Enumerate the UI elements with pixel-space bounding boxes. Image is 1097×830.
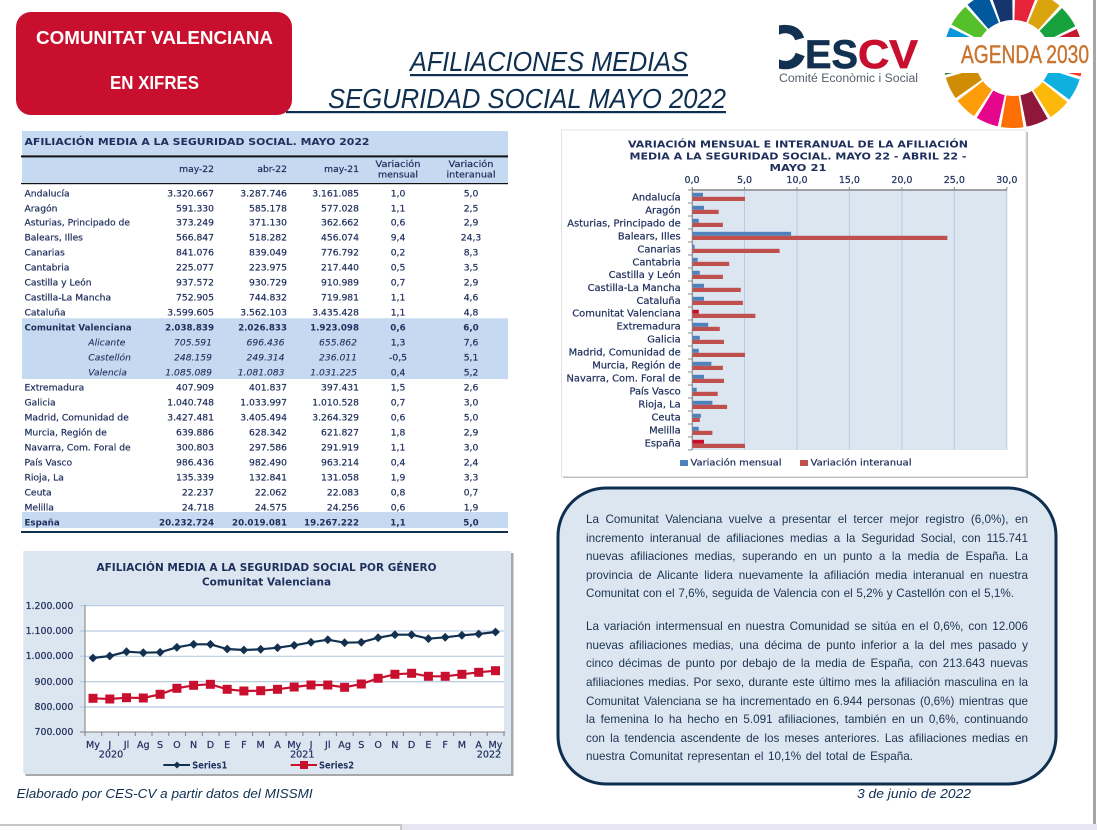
table rows: 937.572 [176,277,214,288]
table rows: 24.575 [255,502,287,513]
table rows: 22.062 [255,487,287,498]
table rows: 7,6 [464,337,478,348]
table rows: 371.130 [249,217,287,228]
table rows: 3.562.103 [240,307,287,318]
bar chart top axis labels: 0,0 [684,175,700,186]
x axis labels: D [408,740,415,751]
table rows: 2,9 [464,217,478,228]
table rows: 24.256 [327,502,359,513]
table rows: 135.339 [176,472,214,483]
table rows: Cantabria [24,262,69,273]
table rows: 0,6 [391,217,405,228]
panel: commentary box background [558,488,1056,784]
table rows: 19.267.222 [304,518,359,528]
bars: annual variation [692,197,947,448]
bars: monthly variation [692,193,791,444]
y axis labels: 800.000 [35,702,73,713]
table rows: 776.792 [321,247,359,258]
table rows: 910.989 [321,277,359,288]
bar chart top axis labels: 15,0 [839,175,860,186]
table rows: 5,0 [464,412,478,423]
table rows: 5,0 [463,518,479,528]
table rows: 0,6 [391,412,405,423]
table rows: 752.905 [176,292,214,303]
x axis labels: D [207,740,214,751]
table rows: País Vasco [24,457,73,468]
table rows: 585.178 [249,203,287,214]
highlighted band Comunitat Valenciana [22,318,508,379]
x axis labels: My [489,740,503,751]
bar chart category labels: Balears, Illes [618,232,681,242]
x axis labels: 2021 [290,750,315,760]
table rows: 696.436 [246,337,285,348]
bar chart top axis labels [684,175,1017,186]
bar chart top axis labels: 20,0 [891,175,912,186]
table rows: Andalucía [24,188,70,199]
table rows: Navarra, Com. Foral de [24,442,131,453]
text: Comunitat Valenciana se ha incrementado en 6.944 personas (0,6%) mientras que [586,695,1028,708]
bar chart top axis labels: 5,0 [737,175,752,186]
table rows: 3,3 [464,472,478,483]
table rows: 1,8 [391,427,405,438]
table rows: 217.440 [321,262,359,273]
table rows: 0,5 [391,262,405,273]
table column headers: abr-22 [257,164,287,175]
bar chart title: VARIACIÓN MENSUAL E INTERANUAL DE LA AFILIACIÓN [628,138,968,150]
x axis labels [86,740,503,760]
x axis labels: O [173,740,181,751]
badge: Comunitat Valenciana en xifres [16,12,292,115]
table rows: 131.058 [321,472,359,483]
table rows: 1.081.083 [238,367,285,378]
text: nuestra Comunitat representan el 10,1% del total de España. [586,750,913,763]
table rows: 1,1 [391,203,405,214]
table rows: 3.264.329 [312,412,359,423]
table rows: 0,7 [464,487,478,498]
x axis labels: My [287,740,301,751]
x axis labels: S [157,740,163,751]
line chart legend: Series2 [319,760,354,772]
x axis labels: Jl [123,740,129,751]
table rows: 24.718 [182,502,214,513]
bar chart category labels: Comunitat Valenciana [572,308,681,320]
text block: commentary [586,513,1028,763]
table rows: 20.019.081 [232,518,287,528]
bar chart category labels [567,192,681,450]
table rows: 1.010.528 [312,397,359,408]
table rows: 2,9 [464,427,478,438]
y axis labels: 1.000.000 [26,651,73,662]
table rows: 401.837 [249,382,287,393]
table rows: 132.841 [249,472,287,483]
table rows: 577.028 [321,203,359,214]
logo: Agenda 2030 wheel [937,0,1092,134]
line series 2 [93,671,496,699]
text: nuevas afiliaciones medias, una décima de punto inferior a la del mes pasado y [586,639,1028,652]
table column headers: may-21 [324,164,359,175]
panel: table of average affiliation [21,131,508,533]
table rows: 9,4 [391,232,405,243]
table rows: Castilla y León [24,277,92,288]
bar chart category labels: Cataluña [637,296,681,307]
panel: line chart by gender [23,551,514,776]
table rows: Cataluña [24,307,66,318]
table rows: 22.237 [182,487,214,498]
bar chart title: MEDIA A LA SEGURIDAD SOCIAL. MAYO 22 - ABRIL 22 - [630,152,966,162]
table rows: Castellón [88,352,131,363]
date: 3 de junio de 2022 [857,786,972,801]
text: afiliaciones medias. Por sexo, durante este último mes la afiliación masculina en la [586,676,1028,689]
table rows: 591.330 [176,203,214,214]
y axis labels [26,601,73,738]
table rows: 236.011 [319,352,357,363]
table rows: 1,5 [391,382,405,393]
x axis labels: S [358,740,364,751]
x axis labels: My [86,740,100,751]
table rows: 407.909 [176,382,214,393]
bar chart category labels: Andalucía [632,192,681,204]
table rows: 20.232.724 [159,518,214,528]
x axis labels: N [190,740,197,751]
table rows: 841.076 [176,247,214,258]
table rows: 3.320.667 [167,188,214,199]
bar chart category labels: País Vasco [629,386,681,398]
x axis labels: 2020 [99,750,123,760]
source note: Elaborado por CES-CV a partir datos del MISSMI [17,786,313,801]
table rows: 3.287.746 [240,188,287,199]
text: nuevas afiliaciones medias, superando en un punto a la media de España. La [586,550,1028,563]
logo: CES CV: Comité Econòmic i Social [779,73,918,85]
table rows: Asturias, Principado de [24,217,130,228]
text: cinco décimas de punto por debajo de la media de España, con 213.643 nuevas [586,657,1028,670]
title: AFILIACIONES MEDIAS [408,46,688,77]
table rows: Castilla-La Mancha [24,292,111,303]
table rows: 1,1 [391,442,405,453]
table rows: Comunitat Valenciana [24,323,132,333]
panel: bar chart of monthly and annual variation [562,130,1028,478]
bar chart category labels: Melilla [649,426,681,436]
table rows: Murcia, Región de [24,427,107,438]
table rows: 5,0 [464,188,478,199]
text: la femenina lo ha hecho en 5.091 afiliaciones, también en un 0,6%, continuando [586,713,1028,726]
table rows: Madrid, Comunidad de [24,412,129,423]
table rows: 1,9 [391,472,405,483]
y axis labels: 1.200.000 [26,601,73,612]
table rows: 1.033.997 [240,397,287,408]
bar chart category labels: Aragón [645,204,681,216]
table rows: 705.591 [174,337,212,348]
table rows: 930.729 [249,277,287,288]
table rows: 986.436 [176,457,214,468]
table rows: Aragón [24,203,58,214]
table rows: 2.026.833 [238,323,287,333]
table column headers: may-22 [179,164,214,175]
table rows: 639.886 [176,427,214,438]
logo: CES CV: ES [805,33,858,77]
logo: CES CV: C [762,14,805,81]
table rows: 1,1 [391,292,405,303]
table rows: 249.314 [246,352,285,363]
table rows: 6,0 [463,323,479,333]
y axis labels: 1.100.000 [26,626,73,637]
text: La variación intermensual en nuestra Comunidad se sitúa en el 0,6%, con 12.006 [586,620,1028,633]
table rows: 1,1 [391,307,405,318]
line chart plot area and axes [80,605,505,736]
table rows: 0,4 [391,457,405,468]
y axis labels: 700.000 [35,727,73,738]
x axis labels: A [274,740,281,751]
line chart title: AFILIACIÓN MEDIA A LA SEGURIDAD SOCIAL POR GÉNERO [96,561,436,574]
x axis labels: F [241,740,247,751]
table rows: Valencia [88,367,127,378]
table rows: Canarias [24,247,65,258]
table rows: 397.431 [321,382,359,393]
table rows: 3,0 [464,397,478,408]
table rows: 2,9 [464,277,478,288]
table rows: 291.919 [321,442,359,453]
table rows: 5,2 [464,367,478,378]
table column headers: Variación [376,159,421,170]
table rows: 0,6 [390,323,406,333]
bar chart category labels: Extremadura [617,322,681,332]
table column headers: Variación [448,159,494,170]
table column headers [21,155,508,184]
bar chart category labels: Canarias [637,244,681,256]
text: incremento interanual de afiliaciones medias a la Seguridad Social, con 115.741 [586,532,1028,545]
bar chart category labels: Asturias, Principado de [567,218,681,230]
table rows: 621.827 [321,427,359,438]
bar chart plot area [688,187,1007,450]
table rows: Galicia [24,397,56,408]
table rows: 628.342 [249,427,287,438]
bar chart top axis labels: 30,0 [996,175,1017,186]
line chart legend: Series1 [192,760,227,772]
bar chart title [628,138,968,174]
bar chart category labels: Rioja, La [638,400,681,410]
bar chart legend: Variación interanual [810,458,912,468]
table rows: 1.031.225 [310,367,357,378]
table title band [22,131,508,156]
bar chart category labels: Castilla y León [609,269,681,281]
table rows: 0,7 [391,277,405,288]
table rows: 1,0 [391,188,405,199]
table rows: 225.077 [176,262,214,273]
table rows: 3,5 [464,262,478,273]
table rows: 248.159 [174,352,212,363]
table rows: España [24,518,60,528]
table rows: 2.038.839 [165,323,214,333]
table rows: 3.599.605 [167,307,214,318]
table rows: 1.923.098 [310,323,359,333]
y axis labels: 900.000 [35,677,73,688]
x axis labels: Ag [137,740,150,751]
table rows: -0,5 [389,352,407,363]
table rows: 4,8 [464,307,478,318]
logo: CES CV [779,24,918,82]
table rows: 0,4 [391,367,405,378]
table rows [24,188,481,528]
table rows: Alicante [87,337,126,348]
table rows: Rioja, La [24,472,64,483]
table rows: 2,4 [464,457,478,468]
table rows: 1,9 [464,502,478,513]
x axis labels: E [224,740,230,751]
x axis labels: O [374,740,382,751]
table rows: 3.435.428 [312,307,359,318]
table rows: 456.074 [321,232,359,243]
table rows: 744.832 [249,292,287,303]
table rows: Melilla [24,502,54,513]
table rows: 0,2 [391,247,405,258]
logo: CES CV: CV [858,33,918,77]
table rows: 24,3 [461,232,481,243]
x axis labels: F [442,740,448,751]
table rows: 655.862 [319,337,357,348]
table rows: 0,8 [391,487,405,498]
bar chart top axis labels: 25,0 [944,175,965,186]
table rows: 5,1 [464,352,478,363]
table rows: 22.083 [327,487,359,498]
table rows: 2,6 [464,382,478,393]
table rows: 839.049 [249,247,287,258]
table rows: 8,3 [464,247,478,258]
line series 1 [93,632,496,658]
table rows: 982.490 [249,457,287,468]
table rows: 719.981 [321,292,359,303]
badge: Comunitat Valenciana en xifres: COMUNITAT VALENCIANA [36,27,273,48]
table rows: 3.427.481 [167,412,214,423]
table rows: 963.214 [321,457,359,468]
table rows: 3,0 [464,442,478,453]
line chart legend [163,760,354,772]
bar chart legend: Variación mensual [690,458,782,468]
table rows: Extremadura [24,382,84,393]
table rows: 3.161.085 [312,188,359,199]
bar chart title: MAYO 21 [770,163,827,174]
x axis labels: M [257,740,265,751]
table column headers: mensual [378,170,418,180]
bar chart category labels: Navarra, Com. Foral de [567,374,681,384]
x axis labels: E [425,740,431,751]
title [286,46,726,114]
table rows: 3.405.494 [240,412,287,423]
text: La Comunitat Valenciana vuelve a presentar el tercer mejor registro (6,0%), en [586,513,1028,526]
table rows: 2,5 [464,203,478,214]
text: provincia de Alicante lidera nuevamente la afiliación media interanual en nuestra [586,569,1028,582]
table column headers: interanual [446,170,496,180]
table rows: 0,6 [391,502,405,513]
table title band: AFILIACIÓN MEDIA A LA SEGURIDAD SOCIAL. MAYO 2022 [24,135,370,148]
x axis labels: J [309,740,312,751]
x axis labels: A [475,740,482,751]
table rows: Ceuta [24,487,52,498]
highlighted band España [22,512,508,528]
table rows: 1,1 [390,518,406,528]
table rows: 223.975 [249,262,287,273]
x axis labels: M [458,740,466,751]
line chart title [96,561,436,588]
bar chart category labels: Murcia, Región de [592,360,681,372]
table rows: Balears, Illes [24,232,83,243]
bar chart category labels: Cantabria [632,258,681,268]
line chart title: Comunitat Valenciana [202,576,331,588]
text: Comunitat con el 7,6%, seguida de Valencia con el 5,2% y Castellón con el 5,1%. [586,587,1014,600]
text: con la tendencia ascendente de los meses anteriores. Las afiliaciones medias en [586,732,1028,745]
bar chart category labels: Madrid, Comunidad de [569,348,681,358]
table rows: 300.803 [176,442,214,453]
bar chart category labels: España [645,438,681,450]
table rows: 1.040.748 [167,397,214,408]
table rows: 297.586 [249,442,287,453]
x axis labels: Jl [324,740,331,751]
table rows: 518.282 [249,232,287,243]
x axis labels: 2022 [477,750,501,760]
bar chart legend [680,458,912,468]
table rows: 1.085.089 [165,367,212,378]
bar chart category labels: Ceuta [652,412,681,424]
badge: Comunitat Valenciana en xifres: EN XIFRES [110,72,199,93]
bar chart category labels: Castilla-La Mancha [588,283,681,294]
table rows: 566.847 [176,232,214,243]
table rows: 1,3 [391,337,405,348]
bar chart category labels: Galicia [647,334,681,346]
title: SEGURIDAD SOCIAL MAYO 2022 [328,83,726,114]
table rows: 4,6 [464,292,478,303]
table rows: 0,7 [391,397,405,408]
table rows: 362.662 [321,217,359,228]
x axis labels: J [107,740,111,751]
table rows: 373.249 [176,217,214,228]
x axis labels: N [391,740,398,751]
bar chart top axis labels: 10,0 [786,175,808,186]
x axis labels: Ag [338,740,351,751]
